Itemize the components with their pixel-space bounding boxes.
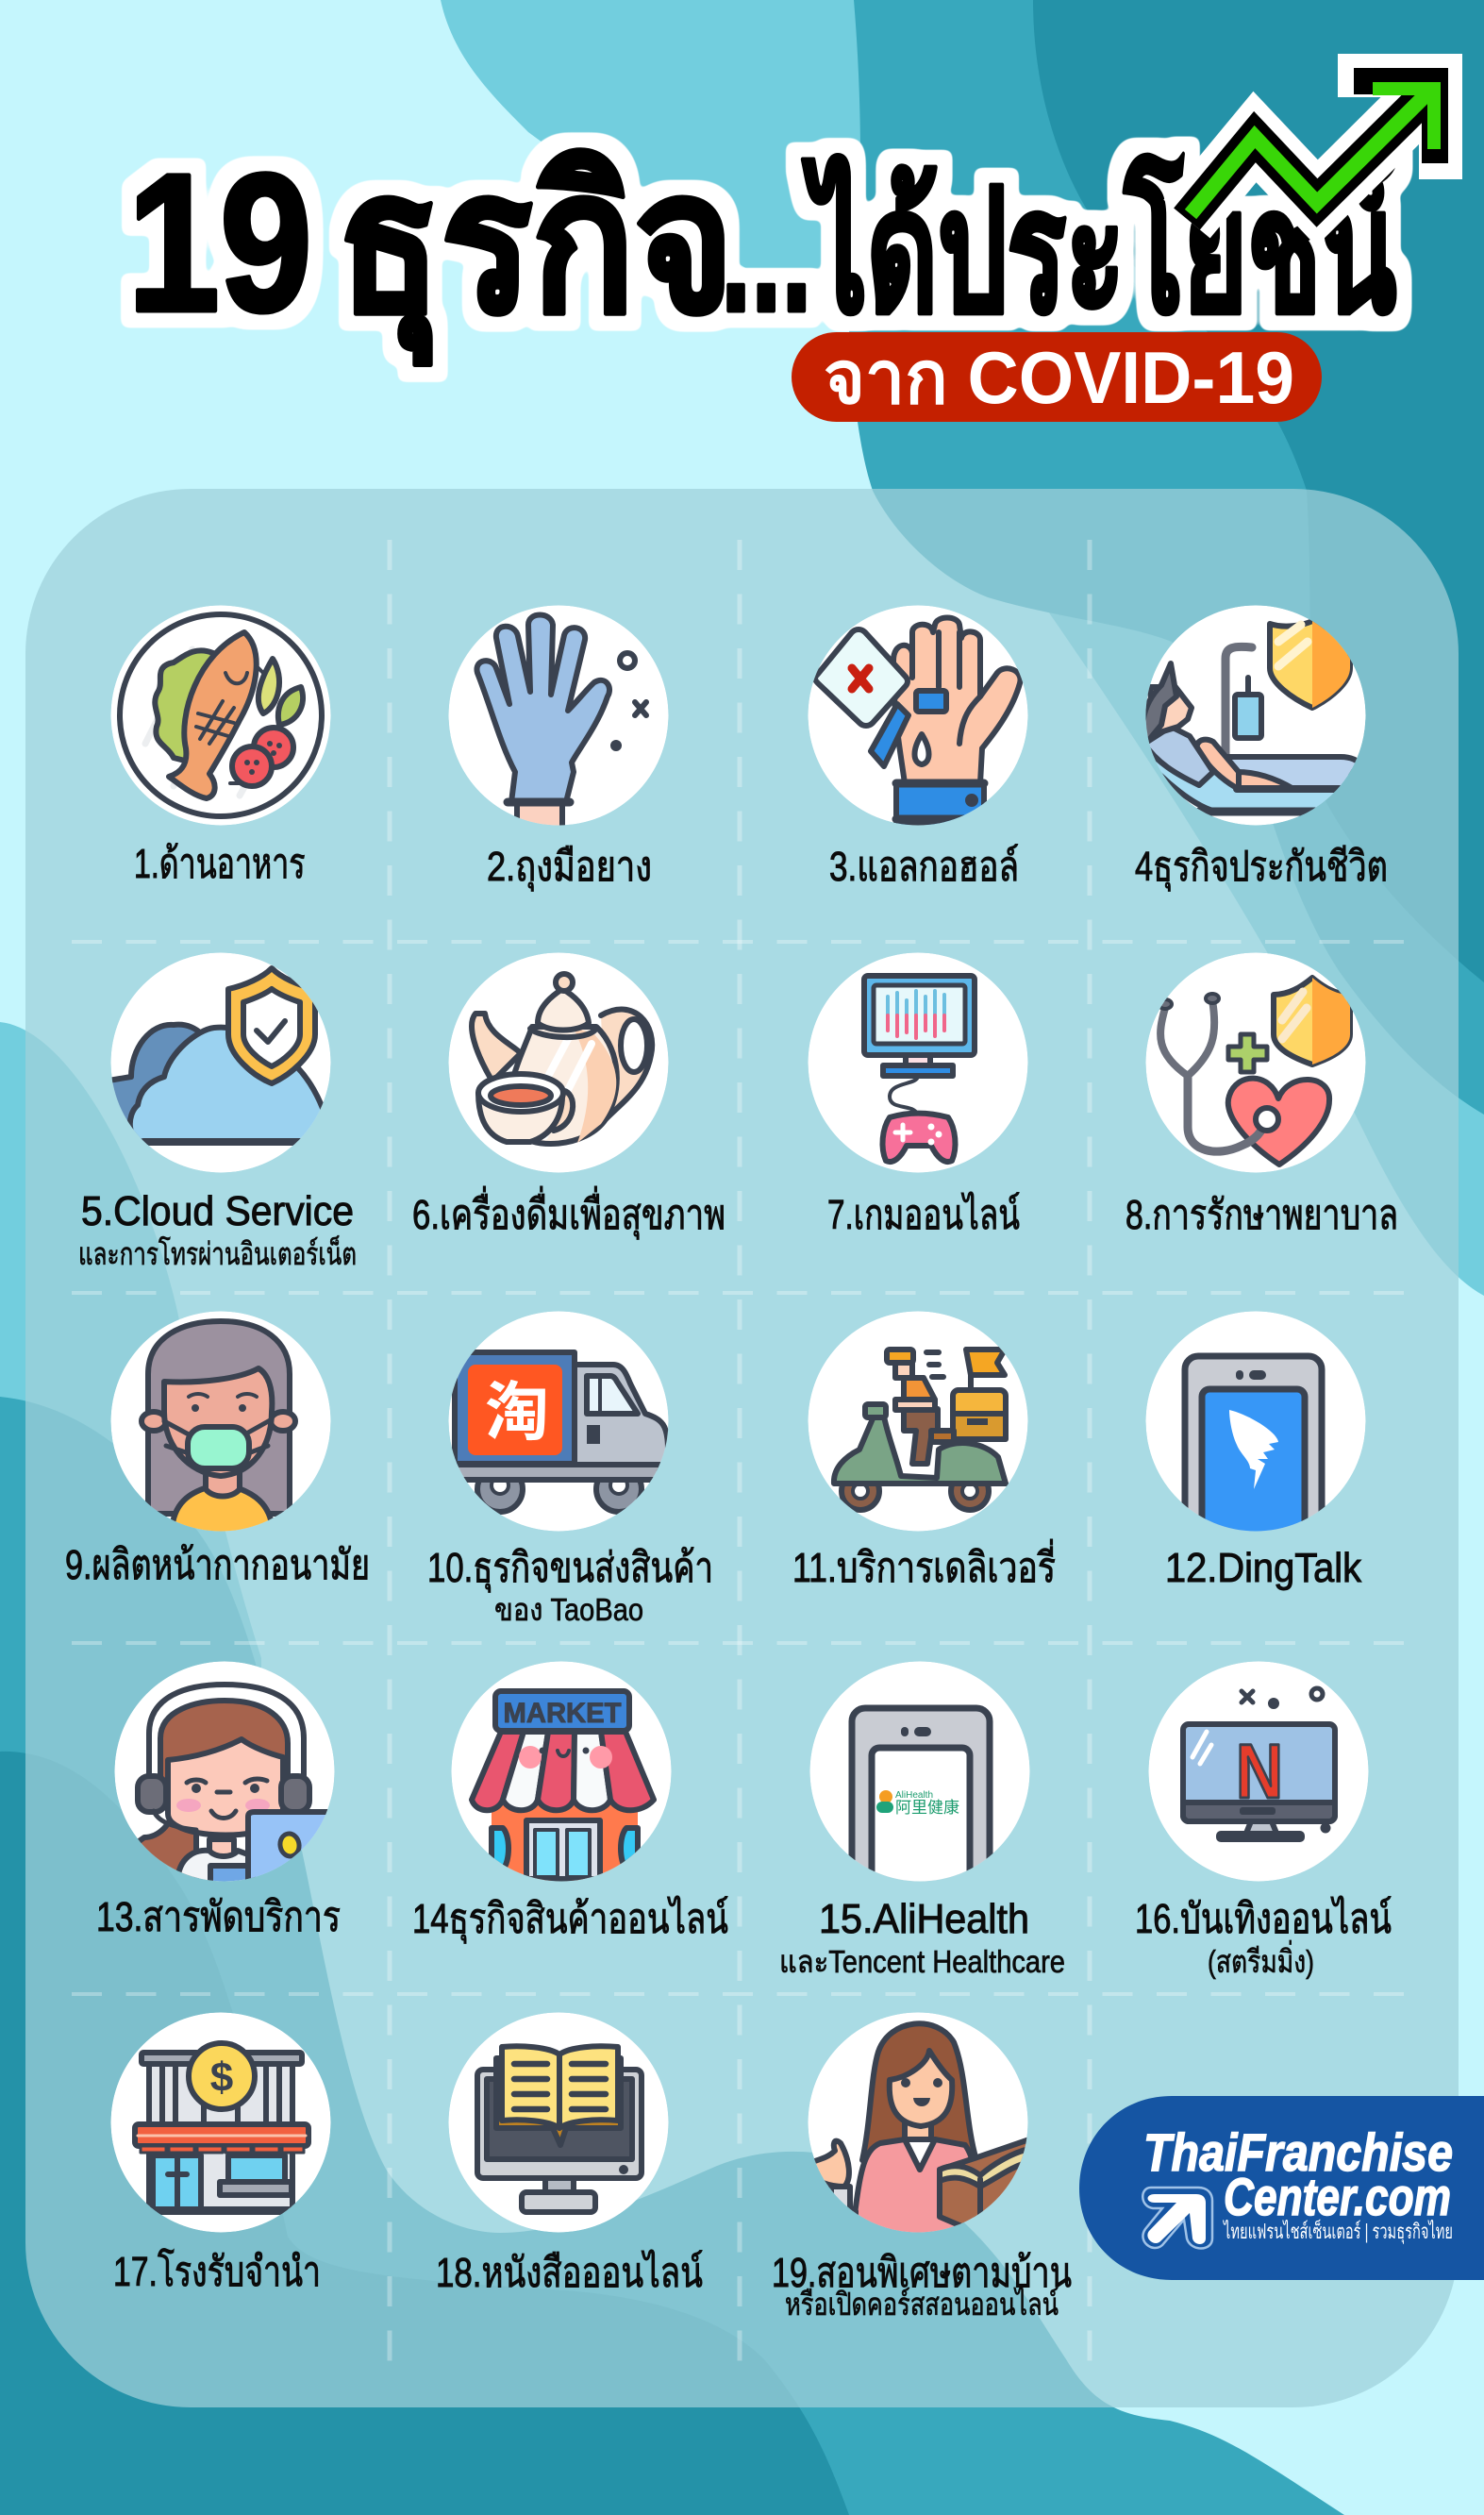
card 11: delivery scooter bbox=[792, 1312, 1056, 1591]
sub label: และTencent Healthcare bbox=[779, 1944, 1065, 1979]
label: 16.บันเทิงออนไลน์ bbox=[1135, 1895, 1392, 1942]
sub label: หรือเปิดคอร์สสอนออนไลน์ bbox=[785, 2287, 1059, 2322]
label: 5.Cloud Service bbox=[81, 1188, 354, 1234]
label: 10.ธุรกิจขนส่งสินค้า bbox=[427, 1545, 713, 1593]
icon: call centre girl bbox=[115, 1661, 342, 1885]
icon: rubber glove bbox=[449, 606, 668, 833]
card 4: life insurance bbox=[1135, 606, 1388, 892]
background wave: mid teal bottom bbox=[0, 1397, 1344, 2515]
label: 2.ถุงมือยาง bbox=[487, 844, 652, 892]
label: 12.DingTalk bbox=[1165, 1545, 1362, 1591]
icon: teacher with book bbox=[807, 2012, 1029, 2236]
label: 6.เครื่องดื่มเพื่อสุขภาพ bbox=[412, 1185, 725, 1240]
label: 18.หนังสือออนไลน์ bbox=[436, 2249, 703, 2296]
icon: pawn shop building: $ bbox=[210, 2054, 233, 2101]
card 9: masks bbox=[65, 1312, 370, 1588]
logo arrow bbox=[1142, 2188, 1212, 2248]
main translucent panel bbox=[25, 489, 1459, 2407]
icon: monitor with book bbox=[449, 2012, 668, 2233]
icon: taobao truck bbox=[449, 1312, 668, 1531]
card 6: health drinks bbox=[412, 953, 725, 1240]
card 2: gloves bbox=[449, 606, 668, 892]
title bbox=[127, 134, 1396, 365]
card 3: alcohol bbox=[808, 606, 1028, 890]
label: 11.บริการเดลิเวอรี่ bbox=[792, 1538, 1056, 1591]
label: 9.ผลิตหน้ากากอนามัย bbox=[65, 1542, 370, 1588]
icon: phone with DingTalk bbox=[1145, 1312, 1366, 1531]
background wave: dark teal bottom bbox=[0, 1752, 849, 2515]
label: 8.การรักษาพยาบาล bbox=[1126, 1192, 1398, 1238]
card 19: tutoring bbox=[772, 2012, 1072, 2322]
icon: phone with AliHealth logo: AliHealth bbox=[895, 1790, 933, 1801]
logo: ThaiFranchise Center bbox=[1079, 2096, 1484, 2280]
card 18: online books bbox=[436, 2012, 703, 2296]
background wave: light teal top right bbox=[441, 0, 1484, 1296]
card 7: online games bbox=[808, 953, 1028, 1238]
icon: woman with mask bbox=[111, 1312, 330, 1534]
background wave: mid teal top right bbox=[849, 0, 1484, 1115]
icon: teapot and cup bbox=[449, 953, 668, 1172]
label: 14ธุรกิจสินค้าออนไลน์ bbox=[412, 1895, 728, 1944]
card 1: food bbox=[111, 606, 330, 887]
icon: monitor with N: N bbox=[1236, 1729, 1283, 1815]
card 17: pawn shop bbox=[111, 2012, 330, 2295]
card 5: cloud service bbox=[78, 953, 357, 1271]
icon: rising green arrow bbox=[1187, 75, 1441, 219]
title: 19 bbox=[127, 134, 312, 353]
icon: market store bbox=[451, 1661, 672, 1882]
sub label: ของ TaoBao bbox=[494, 1592, 643, 1627]
label: 15.AliHealth bbox=[819, 1896, 1029, 1942]
sub label: (สตรีมมิ่ง) bbox=[1208, 1940, 1314, 1979]
label: 7.เกมออนไลน์ bbox=[827, 1191, 1020, 1238]
label: 17.โรงรับจำนำ bbox=[113, 2248, 321, 2295]
card 16: online entertainment bbox=[1135, 1661, 1392, 1979]
card 10: delivery truck bbox=[427, 1312, 713, 1627]
label: 13.สารพัดบริการ bbox=[96, 1894, 341, 1940]
icon: stethoscope heart shield bbox=[1145, 953, 1366, 1172]
card 13: all services bbox=[96, 1661, 342, 1940]
icon: monitor and gamepad bbox=[808, 953, 1028, 1172]
icon: monitor with N bbox=[1149, 1661, 1368, 1882]
icon: sanitizer on hand bbox=[808, 606, 1028, 825]
card 15: AliHealth bbox=[779, 1661, 1065, 1979]
background wave: light teal left bbox=[0, 1022, 261, 1699]
icon: phone with AliHealth logo: 阿里健康 bbox=[895, 1794, 959, 1818]
card 8: medical care bbox=[1126, 953, 1398, 1238]
icon: cloud and shield bbox=[103, 953, 334, 1172]
icon: scooter rider bbox=[808, 1312, 1028, 1531]
subtitle pill: จาก COVID-19 bbox=[824, 336, 1294, 419]
icon: pawn shop building bbox=[111, 2012, 330, 2233]
icon: market store: MARKET bbox=[504, 1698, 621, 1729]
card 14: online shop bbox=[412, 1661, 728, 1944]
label: 3.แอลกอฮอล์ bbox=[829, 844, 1019, 890]
title: ธุรกิจ bbox=[338, 134, 734, 365]
icon: taobao truck: 淘 bbox=[485, 1360, 549, 1453]
label: 4ธุรกิจประกันชีวิต bbox=[1135, 844, 1388, 892]
label: 19.สอนพิเศษตามบ้าน bbox=[772, 2250, 1072, 2296]
column and row dashed dividers bbox=[72, 540, 1408, 2364]
background wave: dark teal top right bbox=[1033, 0, 1484, 982]
card 12: DingTalk bbox=[1145, 1312, 1366, 1591]
sub label: และการโทรผ่านอินเตอร์เน็ต bbox=[78, 1235, 357, 1271]
icon: fish plate bbox=[111, 606, 330, 825]
label: 1.ด้านอาหาร bbox=[134, 841, 306, 887]
icon: patient and shield bbox=[1138, 606, 1374, 825]
icon: phone with AliHealth logo bbox=[809, 1661, 1030, 1937]
